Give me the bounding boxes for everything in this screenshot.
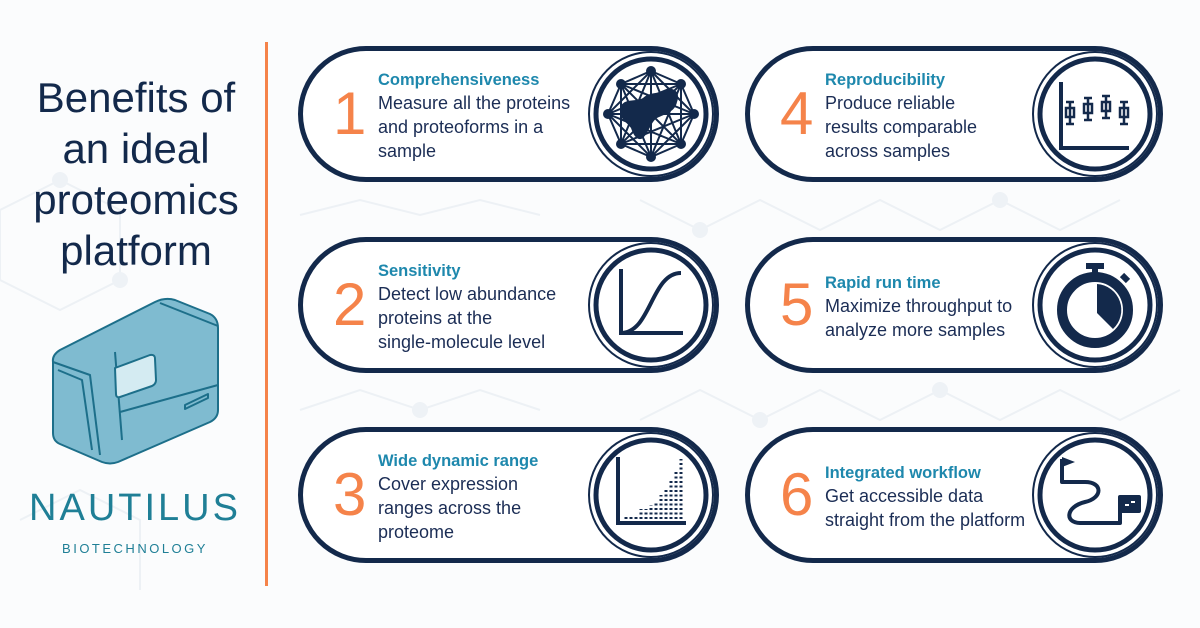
illustration: instrument [52, 298, 219, 464]
text 6: straight from the platform [825, 510, 1025, 530]
text 3: ranges across the [378, 498, 521, 518]
panel: 2 sensitivity [298, 237, 719, 373]
icon: sigmoid [588, 242, 714, 368]
text 2: Sensitivity [378, 262, 461, 280]
text 3: proteome [378, 522, 454, 542]
text 1: sample [378, 141, 436, 161]
text 2 [378, 262, 556, 352]
number 5: 5 [780, 271, 813, 338]
title [33, 74, 239, 274]
text 5 [825, 274, 1012, 340]
logo: NAUTILUS [29, 487, 241, 529]
text 3: Wide dynamic range [378, 452, 538, 470]
text 4: results comparable [825, 117, 977, 137]
text 2: single-molecule level [378, 332, 545, 352]
icon: network [588, 51, 714, 177]
title: proteomics [33, 176, 239, 223]
icon: stopwatch [1032, 242, 1158, 368]
text 2: Detect low abundance [378, 284, 556, 304]
text 4: across samples [825, 141, 950, 161]
text 1: and proteoforms in a [378, 117, 543, 137]
text 2: proteins at the [378, 308, 492, 328]
icon: workflow [1032, 432, 1158, 558]
logo: BIOTECHNOLOGY [62, 541, 208, 556]
text 6: Get accessible data [825, 486, 983, 506]
panel: 5 rapid run time [745, 237, 1163, 373]
number 2: 2 [333, 271, 366, 338]
text 4 [825, 71, 977, 161]
number 6: 6 [780, 461, 813, 528]
text 3: Cover expression [378, 474, 518, 494]
logo [29, 487, 241, 556]
icon: boxplots [1032, 51, 1158, 177]
divider line [265, 42, 268, 586]
text 1: Measure all the proteins [378, 93, 570, 113]
text 1: Comprehensiveness [378, 71, 539, 89]
text 1 [378, 71, 570, 161]
title: an ideal [62, 125, 210, 172]
text 3 [378, 452, 538, 542]
text 5: analyze more samples [825, 320, 1005, 340]
number 1: 1 [333, 80, 366, 147]
panel: 6 integrated workflow [745, 427, 1163, 563]
text 4: Produce reliable [825, 93, 955, 113]
panel: 3 dynamic range [298, 427, 719, 563]
panel: 1 comprehensiveness [298, 46, 719, 182]
icon: dot chart [588, 432, 714, 558]
text 4: Reproducibility [825, 71, 945, 89]
text 5: Maximize throughput to [825, 296, 1012, 316]
panel: 4 reproducibility [745, 46, 1163, 182]
number 3: 3 [333, 461, 366, 528]
title: Benefits of [37, 74, 235, 121]
text 6: Integrated workflow [825, 464, 981, 482]
text 6 [825, 464, 1025, 530]
text 5: Rapid run time [825, 274, 941, 292]
title: platform [60, 227, 212, 274]
number 4: 4 [780, 80, 813, 147]
